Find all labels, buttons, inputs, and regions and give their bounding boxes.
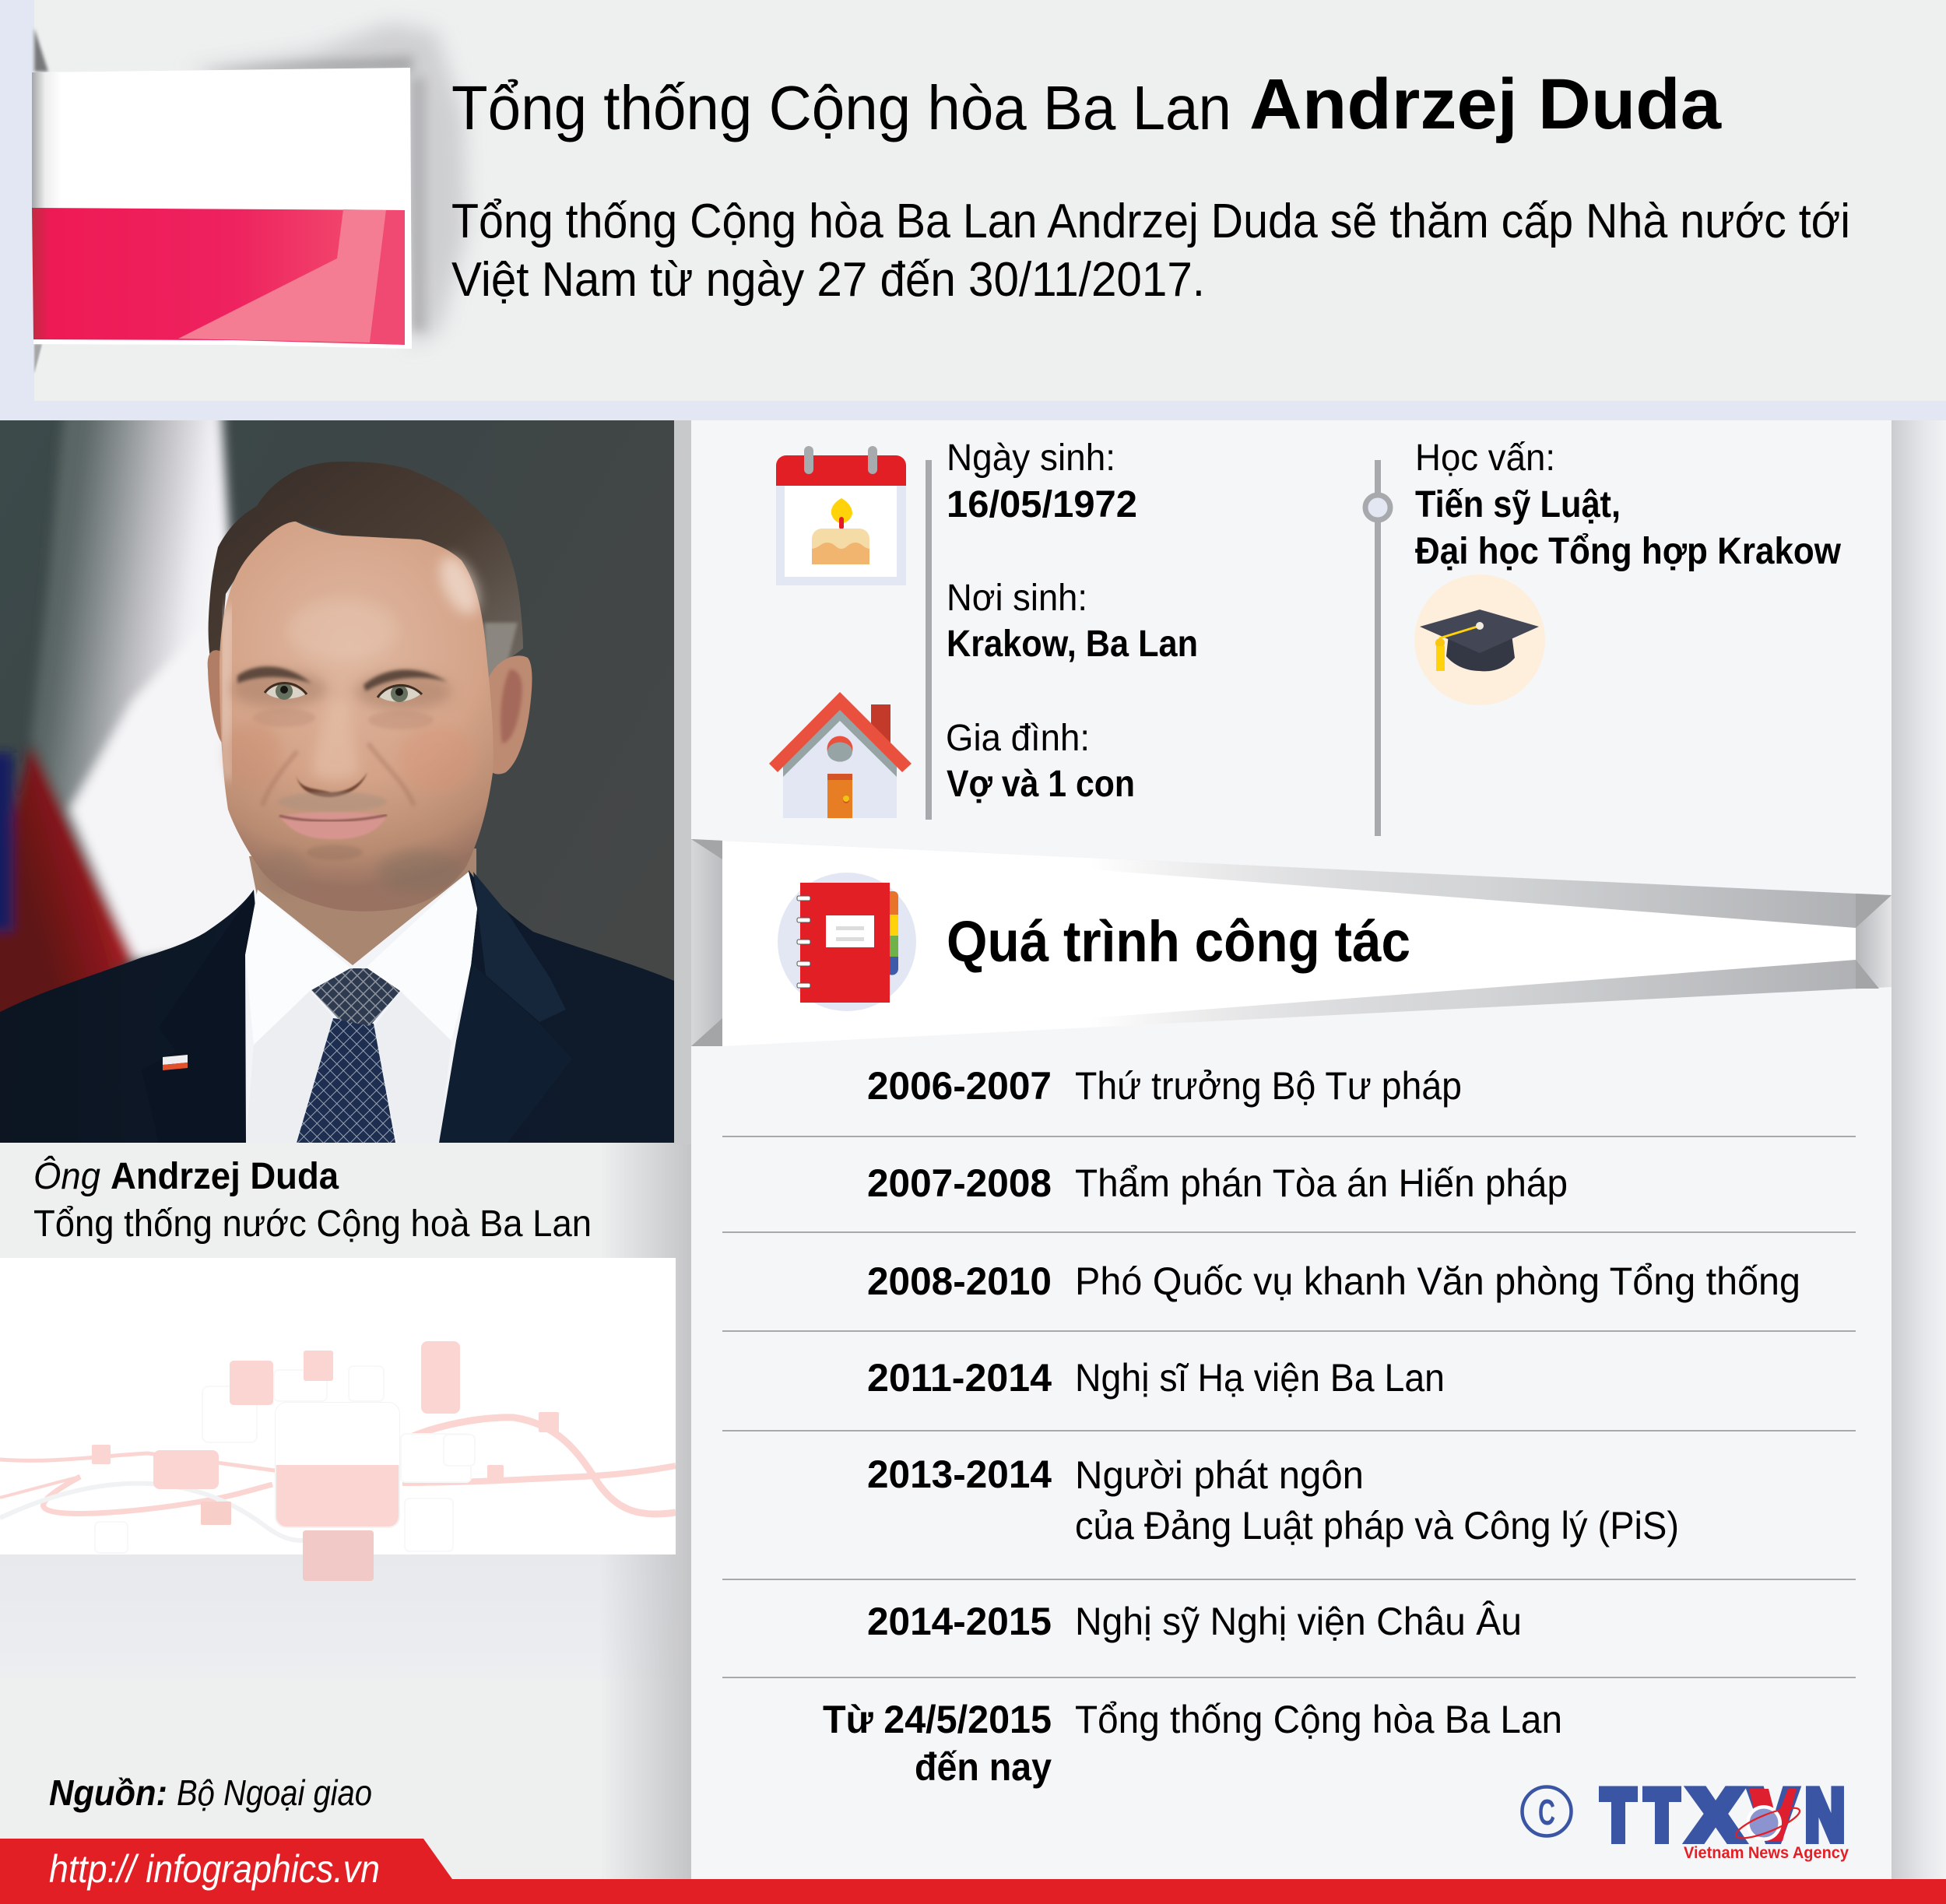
title [451,65,1722,144]
row 2007-2008: Thẩm phán Tòa án Hiến pháp [1075,1161,1568,1205]
portrait: left ear [207,650,221,743]
personal info: birth date, birthplace, family: Gia đình: [946,718,1090,759]
portrait: tie [297,968,400,1143]
portrait: shirt [245,872,477,1143]
row from 2015: Tổng thống Cộng hòa Ba Lan [1075,1698,1562,1741]
portrait: neck [249,848,476,973]
agency letters: V [1750,1774,1797,1856]
portrait: right lapel [473,872,566,1022]
portrait: grey temple [483,621,518,677]
portrait: right ear [489,655,532,774]
row 2011-2014 [867,1356,1445,1400]
row 2006-2007 [867,1064,1462,1108]
intro text: Tổng thống Cộng hòa Ba Lan Andrzej Duda sẽ thăm cấp Nhà nước tới [451,195,1850,248]
icon: Polish flag [32,68,412,349]
caption: name [33,1155,592,1245]
row from 2015 [823,1698,1562,1789]
copyright mark: C [1538,1792,1555,1832]
source note: Bộ Ngoại giao [177,1772,372,1813]
footer: red band with URL: http:// infographics.vn [49,1847,380,1891]
panel: header [32,0,1946,401]
panel: left column [0,420,691,1882]
banner: career heading ribbon [691,839,1892,1046]
row 2013-2014 [867,1453,1679,1547]
row 2007-2008 [867,1161,1568,1205]
icon: house [769,692,912,818]
intro text [451,195,1850,307]
portrait: shirt shading [439,1138,440,1143]
row 2008-2010: 2008-2010 [867,1259,1052,1303]
personal info: birth date, birthplace, family: Vợ và 1 con [947,764,1135,805]
icon: notebook [778,873,916,1011]
personal info: education: Tiến sỹ Luật, [1415,484,1621,525]
row 2013-2014: Người phát ngôn [1075,1453,1364,1497]
caption: name: Andrzej Duda [111,1156,339,1197]
footer: red band with URL [0,1839,1946,1904]
personal info: birth date, birthplace, family: Ngày sinh: [947,437,1115,479]
portrait: right ear shadow [501,669,522,743]
portrait: collar [245,872,477,1045]
personal info: birth date, birthplace, family [946,437,1198,805]
caption: name: Ông [33,1155,100,1197]
personal info: education [1415,437,1842,572]
title: Andrzej Duda [1249,65,1722,144]
row 2014-2015 [867,1600,1522,1643]
agency letters: T [1601,1774,1635,1856]
row from 2015: đến nay [915,1745,1052,1789]
portrait: left lapel [251,890,254,893]
row 2011-2014: Nghị sĩ Hạ viện Ba Lan [1075,1356,1445,1400]
row 2008-2010: Phó Quốc vụ khanh Văn phòng Tổng thống [1075,1259,1800,1303]
row 2006-2007: 2006-2007 [867,1064,1052,1108]
graphic: central flag square [276,1403,399,1527]
flag shadow [34,23,467,374]
caption: name: Tổng thống nước Cộng hoà Ba Lan [33,1203,592,1245]
agency letters: N [1805,1774,1845,1856]
panel: career history [691,987,1892,1880]
portrait: facial details [225,550,486,894]
agency tagline: Vietnam News Agency [1684,1844,1849,1862]
heading: career: Quá trình công tác [947,909,1410,974]
red V and globe [1733,1789,1803,1844]
banner backing folds [691,833,1892,1055]
icon: graduation cap [1414,574,1545,705]
portrait photo [0,389,674,1143]
icon: birthday calendar [776,446,906,585]
divider: education marker [1365,460,1390,836]
row 2007-2008: 2007-2008 [867,1161,1052,1205]
row 2013-2014: 2013-2014 [867,1453,1052,1496]
row 2014-2015: 2014-2015 [867,1600,1052,1643]
panel: personal info [691,420,1892,895]
portrait: hair [209,462,523,659]
row 2011-2014: 2011-2014 [867,1356,1052,1400]
title: Tổng thống Cộng hòa Ba Lan [451,73,1231,142]
flag behind portrait [0,420,257,1012]
row 2014-2015: Nghị sỹ Nghị viện Châu Âu [1075,1600,1522,1643]
personal info: birth date, birthplace, family: 16/05/1972 [947,484,1137,525]
portrait: face [220,522,494,912]
copyright mark [1523,1787,1571,1835]
personal info: birth date, birthplace, family: Krakow, Ba Lan [947,624,1198,665]
agency letters: T [1645,1774,1679,1856]
portrait: lapel pin [163,1055,188,1070]
graphic: lower pink tab [303,1530,374,1581]
row 2006-2007: Thứ trưởng Bộ Tư pháp [1075,1064,1462,1108]
graphic: decorative squares and ribbons [0,1258,676,1581]
row from 2015: Từ 24/5/2015 [823,1698,1052,1741]
source note [49,1772,372,1813]
panel: right strip [1892,420,1946,1880]
source note: Nguồn: [49,1772,167,1813]
row 2013-2014: của Đảng Luật pháp và Công lý (PiS) [1075,1504,1679,1547]
agency letters: X [1689,1774,1742,1856]
career timeline [722,1064,1856,1789]
divider: personal info left [926,460,932,820]
logo: TTXVN [1523,1774,1849,1862]
personal info: education: Học vấn: [1415,437,1555,479]
personal info: education: Đại học Tổng hợp Krakow [1415,531,1842,572]
portrait: suit [0,870,674,1143]
intro text: Việt Nam từ ngày 27 đến 30/11/2017. [451,253,1205,307]
personal info: birth date, birthplace, family: Nơi sinh: [947,578,1087,619]
agency letters [1601,1774,1845,1856]
